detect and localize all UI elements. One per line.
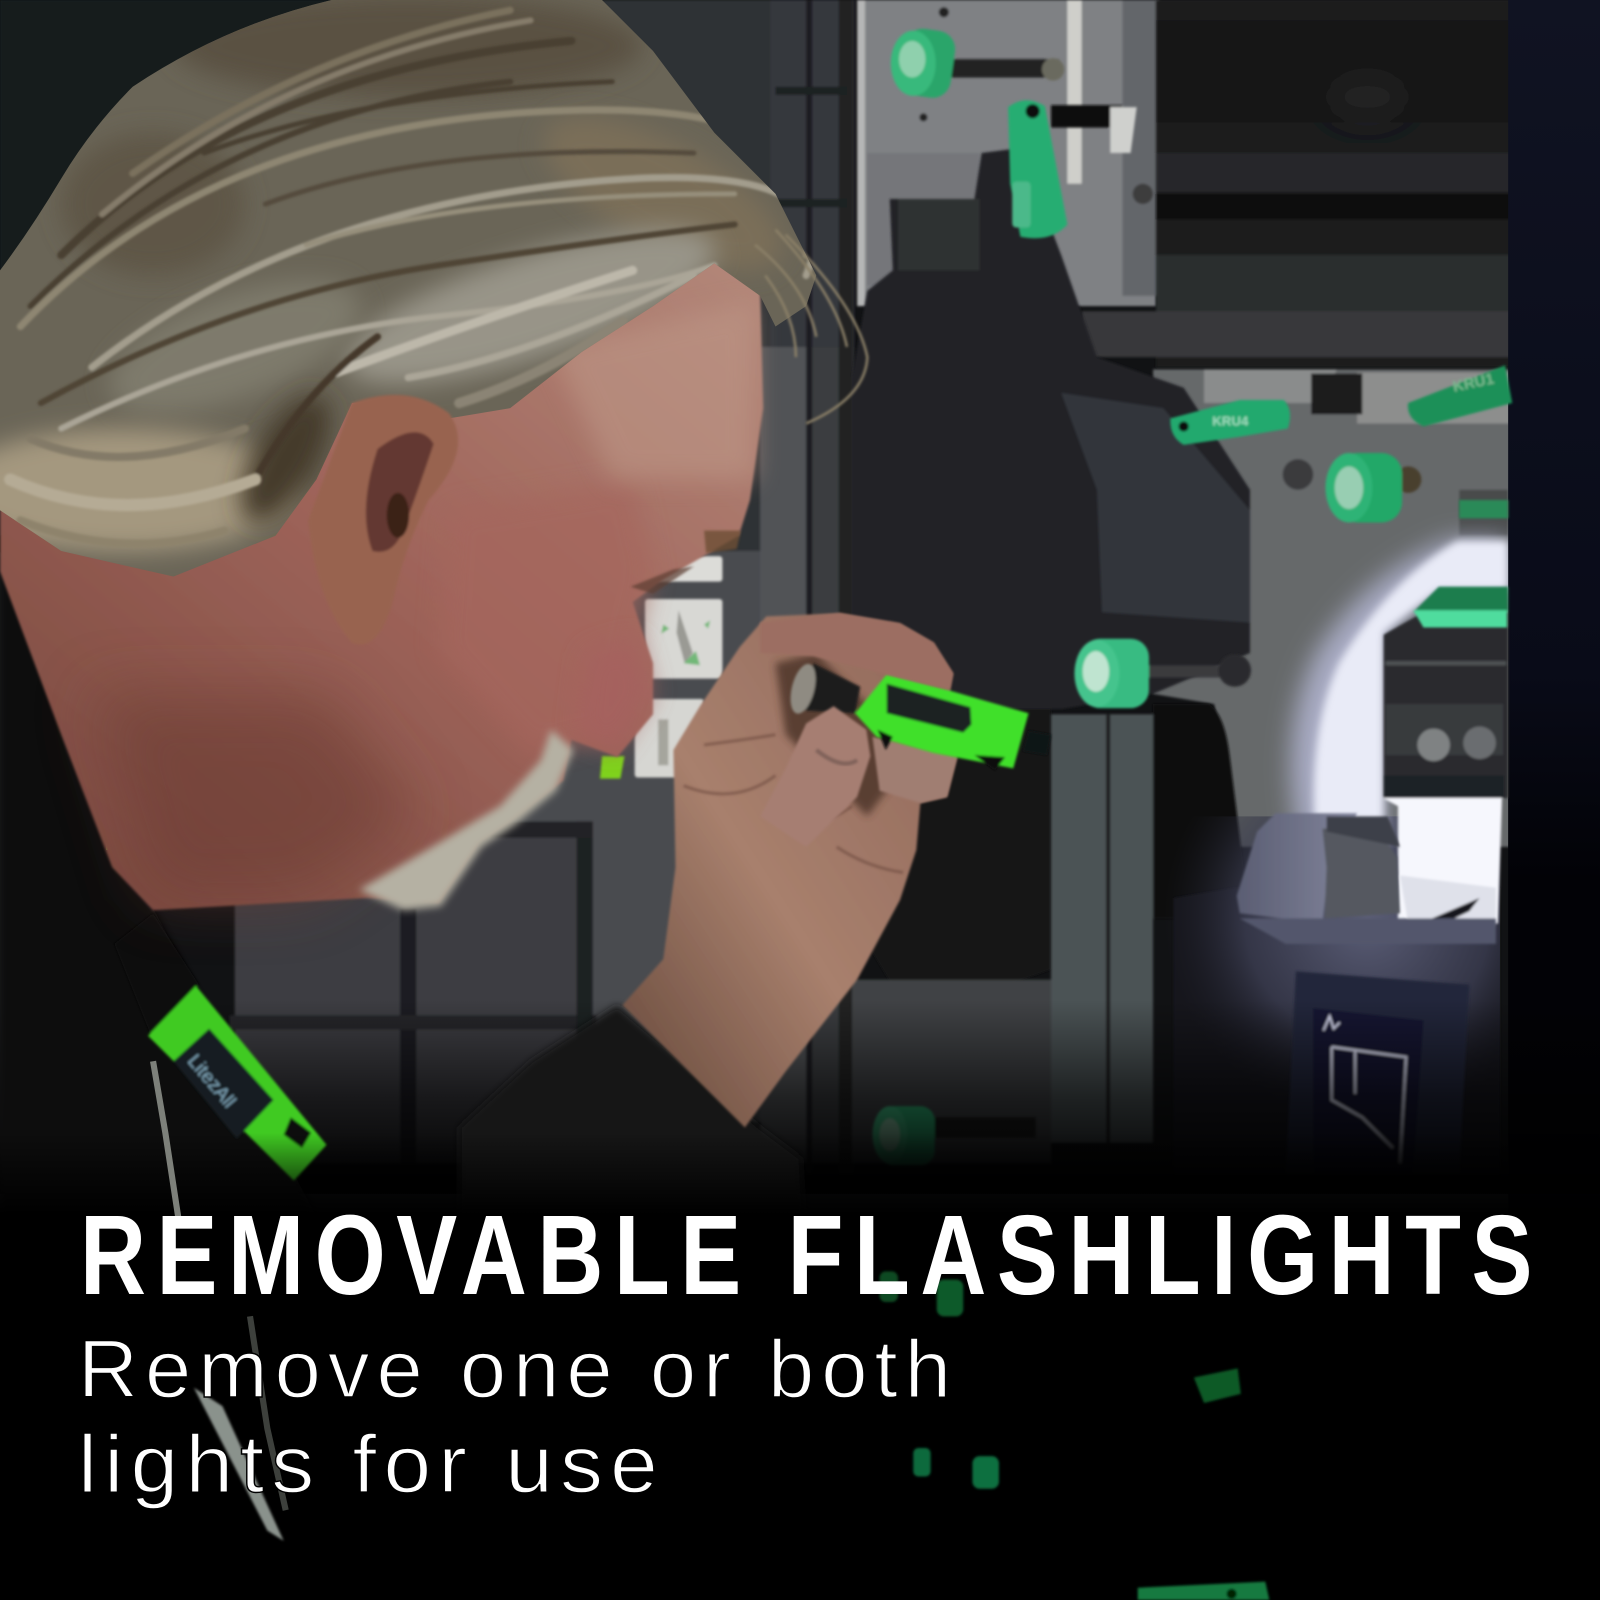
flashlight beam glow bbox=[1291, 539, 1508, 847]
knob: lower bbox=[872, 1106, 1036, 1165]
handle: KRU1: KRU1 bbox=[1451, 370, 1496, 396]
lanyard flashlight bbox=[114, 913, 327, 1181]
lower shadow fade over foreground bbox=[0, 1133, 1600, 1214]
green tray bbox=[1413, 500, 1508, 628]
panel: grey door behind the man bbox=[0, 0, 854, 1173]
lanyard strap bbox=[153, 1061, 286, 1541]
face shading bbox=[92, 301, 755, 898]
thumb bbox=[760, 706, 870, 847]
palm bbox=[622, 613, 957, 1128]
palm creases bbox=[684, 735, 903, 872]
panel: lower metal strips bbox=[852, 704, 1250, 1163]
handle: KRU4: KRU4 bbox=[1212, 414, 1249, 429]
index finger over flashlight bbox=[760, 613, 953, 690]
housing base in the dark bbox=[1173, 888, 1500, 1173]
neck and face bbox=[0, 260, 763, 910]
handle: KRU4 bbox=[1170, 400, 1290, 445]
hand holding flashlight bbox=[622, 613, 1051, 1128]
panel: dark upper-right interior bbox=[1082, 0, 1523, 367]
handle: upper bbox=[1008, 100, 1137, 238]
lanyard flashlight: LitezAll bbox=[183, 1050, 240, 1112]
lower fingers bbox=[872, 737, 957, 803]
panel: window inside the lit opening bbox=[1383, 612, 1508, 923]
panel: dispenser housing with screen bbox=[1237, 813, 1496, 1173]
panel: right metal plate bbox=[1153, 369, 1512, 847]
bottom dark fade bbox=[0, 1000, 1600, 1194]
lit glow on housing bbox=[1186, 816, 1500, 1062]
subheading line 1: Remove one or both bbox=[78, 1324, 958, 1415]
knob: right bbox=[1325, 453, 1421, 522]
loose strands at temple bbox=[755, 230, 867, 423]
subheading line 2: lights for use bbox=[78, 1419, 665, 1510]
green knobs and handles on machine bbox=[872, 26, 1512, 1165]
jacket bbox=[0, 536, 806, 1255]
panel: instruction labels on door bbox=[600, 556, 722, 779]
panel: upper metal plate of machine bbox=[857, 0, 1159, 306]
handle: KRU1 bbox=[1408, 365, 1512, 427]
subheading bbox=[78, 1324, 958, 1510]
hair bbox=[0, 0, 878, 612]
beard bbox=[359, 730, 573, 910]
shadow between fingers and thumb bbox=[776, 653, 898, 816]
knob: upper left bbox=[891, 26, 1064, 100]
knob: center bbox=[1074, 639, 1251, 708]
flashlight in hand bbox=[786, 661, 1051, 770]
ear bbox=[308, 395, 458, 645]
panel: black hood of machine bbox=[852, 148, 1250, 995]
man bbox=[0, 0, 1051, 1255]
dim green parts in the dark lower area bbox=[880, 1271, 1269, 1600]
panel: navy right column bbox=[1508, 0, 1600, 1224]
